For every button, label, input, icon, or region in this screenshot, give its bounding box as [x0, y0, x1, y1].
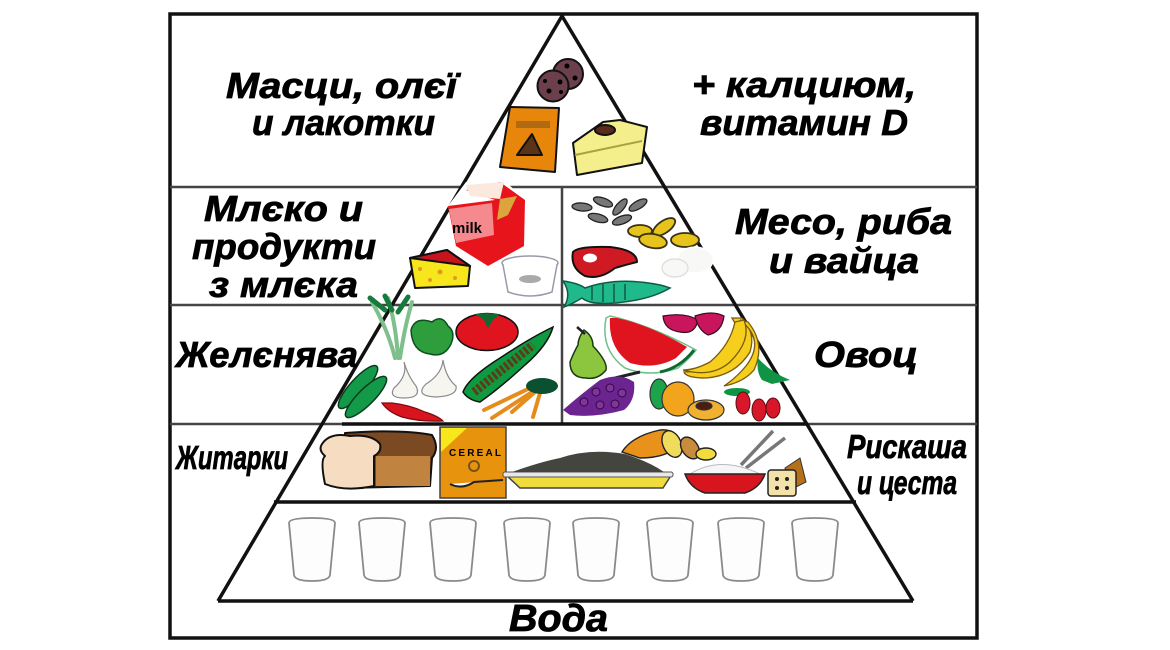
icon: crackers: [768, 458, 806, 496]
icon: egg shells: [662, 247, 713, 277]
icon: milk carton: [448, 181, 525, 266]
left labels: Желєнява: [174, 334, 358, 375]
icon: garlic: [392, 360, 456, 398]
icon: chips bag: [500, 107, 559, 172]
icon: broccoli: [411, 319, 453, 355]
icon: glass 5: [573, 518, 619, 581]
icon: carrots: [484, 378, 558, 418]
icon: meat: [572, 247, 637, 277]
icon: bananas: [683, 318, 759, 386]
right labels: [692, 64, 967, 501]
icon: glass 2: [359, 518, 405, 581]
water glasses row: [289, 518, 838, 581]
left labels: з млєка: [209, 264, 358, 305]
right labels: Месо, риба: [735, 201, 952, 242]
icon: cherries and leaves: [724, 358, 790, 421]
icon: cheese: [410, 250, 470, 288]
icon: cake: [573, 120, 647, 175]
right labels: и цеста: [857, 464, 957, 501]
icon: tomato: [456, 313, 518, 350]
icon: strawberries: [663, 313, 724, 335]
icon: glass 3: [430, 518, 476, 581]
left labels: и лакотки: [252, 102, 435, 143]
pyramid outline: [218, 16, 913, 601]
icon: glass 1: [289, 518, 335, 581]
icon: beans: [572, 195, 649, 227]
icon: pear: [570, 327, 606, 378]
right labels: витамин D: [700, 102, 908, 143]
icon: glass 8: [792, 518, 838, 581]
icon: scallions: [370, 296, 412, 358]
icon: bread loaf: [321, 431, 436, 489]
right labels: и вайца: [769, 240, 919, 281]
right labels: Рискаша: [847, 428, 967, 465]
icon: nuts: [628, 215, 699, 250]
icon: peas: [333, 361, 391, 422]
outer frame: [170, 14, 977, 638]
icon: corn: [463, 327, 553, 402]
icon: glass 4: [504, 518, 550, 581]
icon: glass 6: [647, 518, 693, 581]
water label: Вода: [509, 598, 608, 640]
icon: baguette: [622, 428, 716, 462]
icon: cookies: [538, 59, 583, 102]
icon: yogurt cup: [502, 256, 558, 296]
right labels: + калциюм,: [692, 64, 916, 105]
left labels: продукти: [192, 226, 376, 267]
left labels: Млєко и: [204, 188, 363, 229]
icon: glass 7: [718, 518, 764, 581]
left labels: Житарки: [175, 439, 288, 476]
icon: watermelon: [605, 316, 696, 373]
right labels: Овоц: [814, 334, 918, 375]
left labels: [174, 65, 461, 476]
left labels: Масци, олєї: [226, 65, 461, 106]
tier divider lines: [170, 187, 977, 424]
icon: fish: [563, 281, 670, 307]
icon: cereal box: CEREAL: [449, 448, 501, 459]
icon: chili pepper: [382, 403, 443, 421]
icon: rice bowl with chopsticks: [685, 431, 785, 493]
icon: peach and leaf: [650, 379, 724, 420]
icon: cereal box: [440, 427, 506, 498]
icon: grapes: [563, 372, 640, 416]
icon: pasta plate: [503, 452, 673, 488]
icon: milk carton: milk: [452, 220, 483, 237]
